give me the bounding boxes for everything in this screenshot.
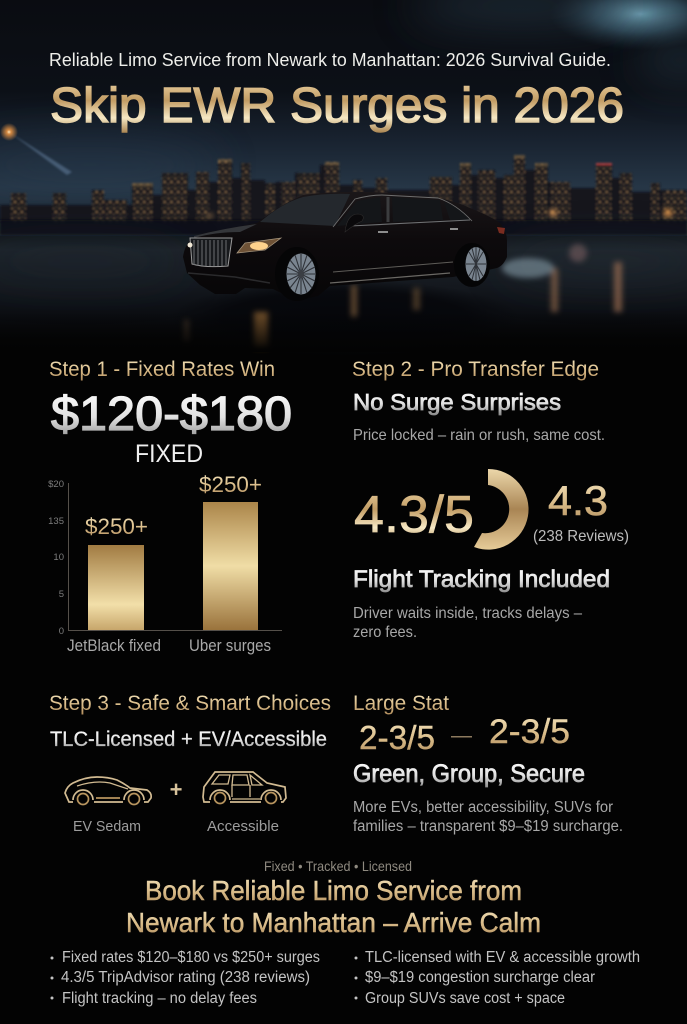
category label: JetBlack fixed bbox=[67, 637, 161, 655]
stat value: 2-3/5 bbox=[489, 713, 570, 751]
icon label: Accessible bbox=[207, 818, 279, 835]
description: Driver waits inside, tracks delays – bbox=[353, 605, 582, 622]
bullet list left: Flight tracking – no delay fees bbox=[62, 990, 257, 1007]
stat value: 2-3/5 bbox=[359, 719, 435, 756]
grille bbox=[190, 238, 232, 267]
fixed label: FIXED bbox=[135, 440, 203, 468]
bar: JetBlack fixed bbox=[88, 545, 144, 630]
title: Skip EWR Surges in 2026 bbox=[50, 79, 624, 133]
limo car bbox=[183, 192, 507, 301]
heading: step 3: Step 3 - Safe & Smart Choices bbox=[49, 692, 331, 715]
bar chart: 5 bbox=[59, 589, 64, 600]
plus sign: + bbox=[170, 777, 182, 802]
city horizon lights bbox=[208, 209, 672, 218]
bullet list left: Fixed rates $120–$180 vs $250+ surges bbox=[62, 949, 320, 966]
tagline: Fixed • Tracked • Licensed bbox=[264, 858, 412, 874]
icon: accessible SUV bbox=[203, 772, 286, 804]
street lamp flare bbox=[0, 123, 72, 175]
side windows bbox=[337, 197, 470, 226]
bar value: $250+ bbox=[199, 472, 262, 497]
subheading: Flight Tracking Included bbox=[353, 566, 610, 593]
panel: large stat bbox=[353, 692, 623, 835]
hero photo: limo at night with skyline bbox=[0, 0, 687, 356]
bullet list right bbox=[354, 949, 640, 1007]
panel: step 3 safe and smart choices bbox=[49, 692, 331, 835]
bar chart: $20 bbox=[48, 479, 64, 490]
bullet list left bbox=[50, 949, 320, 1007]
subheading: Green, Group, Secure bbox=[353, 760, 585, 788]
icon: EV sedan bbox=[65, 777, 151, 804]
dash bbox=[451, 736, 472, 738]
city skyline bbox=[0, 155, 687, 222]
panel: step 1 fixed rates bbox=[48, 358, 292, 655]
car shadow on tarmac bbox=[170, 280, 520, 356]
icon label: EV Sedam bbox=[73, 818, 141, 835]
front wheel bbox=[275, 247, 319, 301]
bar value: $250+ bbox=[85, 514, 148, 539]
bullet list right: TLC-licensed with EV & accessible growth bbox=[365, 949, 640, 966]
CTA heading line 2: Newark to Manhattan – Arrive Calm bbox=[126, 907, 541, 938]
windshield bbox=[260, 194, 350, 226]
panel: step 2 pro transfer edge bbox=[352, 358, 629, 641]
rating stat: 4.3/5 bbox=[354, 486, 474, 544]
subheading: No Surge Surprises bbox=[353, 389, 561, 415]
bar chart bbox=[48, 472, 282, 655]
bullet list left: 4.3/5 TripAdvisor rating (238 reviews) bbox=[61, 969, 310, 986]
hood highlight bbox=[194, 224, 257, 238]
description: Price locked – rain or rush, same cost. bbox=[353, 427, 605, 444]
rear wheel bbox=[454, 243, 490, 287]
description: More EVs, better accessibility, SUVs for bbox=[353, 799, 613, 816]
subheading: TLC-Licensed + EV/Accessible bbox=[50, 728, 327, 751]
heading: step 1: Step 1 - Fixed Rates Win bbox=[49, 358, 275, 381]
description line 2: zero fees. bbox=[353, 624, 417, 641]
headlight bbox=[237, 238, 281, 253]
subtitle: Reliable Limo Service from Newark to Manhattan: 2026 Survival Guide. bbox=[49, 49, 611, 70]
rating number: 4.3 bbox=[548, 477, 608, 524]
reflections bbox=[184, 244, 622, 348]
bullet list right: $9–$19 congestion surcharge clear bbox=[365, 969, 595, 986]
category label: Uber surges bbox=[189, 637, 271, 655]
bullet list right: Group SUVs save cost + space bbox=[365, 990, 565, 1007]
bar chart: 0 bbox=[59, 626, 64, 637]
review count: (238 Reviews) bbox=[533, 528, 629, 545]
heading: large stat: Large Stat bbox=[353, 692, 449, 715]
heading: step 2: Step 2 - Pro Transfer Edge bbox=[352, 358, 599, 381]
description line 2: families – transparent $9–$19 surcharge. bbox=[353, 818, 623, 835]
wet tarmac bbox=[0, 236, 687, 350]
bar chart: 10 bbox=[53, 552, 64, 563]
large price stat: $120-$180 bbox=[51, 388, 292, 441]
panel: call to action bbox=[50, 858, 640, 1007]
bar: Uber surges bbox=[203, 502, 258, 630]
bar chart: 135 bbox=[48, 516, 64, 527]
CTA heading line 1: Book Reliable Limo Service from bbox=[145, 875, 522, 906]
icon: rating ring bbox=[474, 469, 529, 550]
